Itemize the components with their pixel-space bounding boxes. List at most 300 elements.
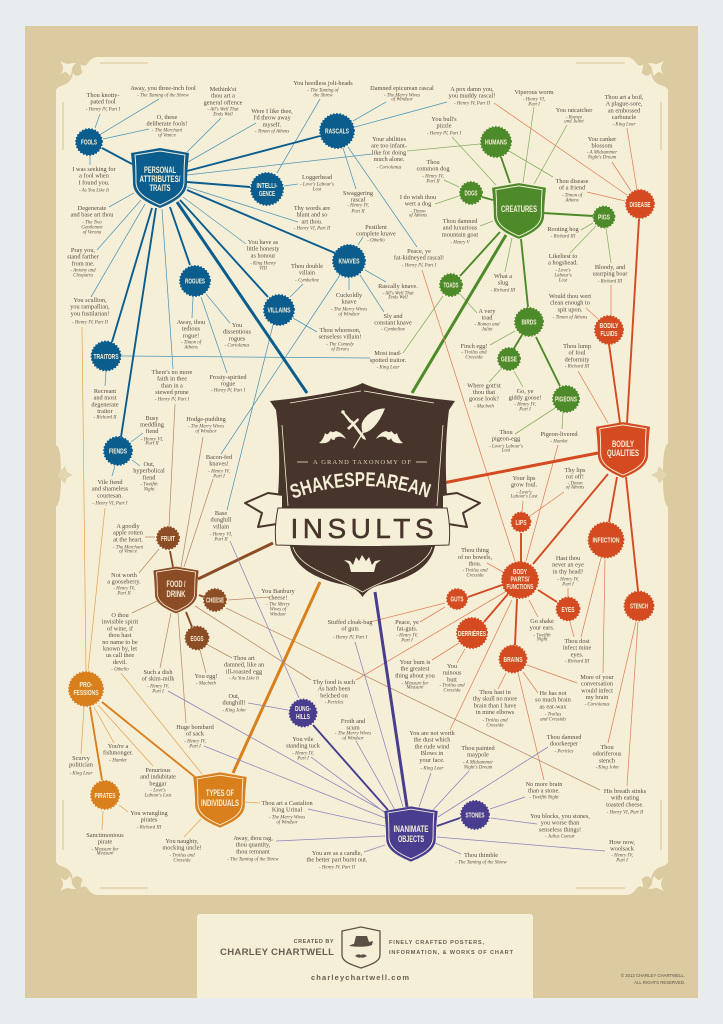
quote: faith in thee — [157, 376, 187, 383]
connectors: brown branches — [170, 551, 204, 627]
quote: brain than I have — [474, 702, 516, 709]
node: fiends — [104, 437, 132, 465]
quote: - Love's — [150, 789, 166, 794]
quote: Not worth — [111, 572, 137, 579]
quote: Part I — [188, 745, 201, 750]
node: bodily fluids — [595, 316, 623, 344]
quote: grow foul. — [511, 482, 538, 489]
quote: villain — [213, 523, 230, 530]
quote: Most toad- — [374, 350, 402, 357]
quote: Thou art a Castalion — [261, 800, 313, 807]
quote: Thou art a boil, — [605, 94, 643, 101]
quote: Night — [536, 638, 548, 643]
quote: tedious — [182, 326, 201, 333]
quote: Your lips — [513, 475, 535, 482]
quote: your face. — [419, 757, 445, 764]
quote: Thou damned — [443, 218, 477, 225]
quote: damned, like an — [224, 662, 265, 669]
node: professions — [69, 672, 103, 706]
quote: A pox damn you, — [450, 86, 494, 93]
quote: Thou damned — [547, 734, 581, 741]
node: geese — [498, 348, 520, 370]
ribbon right tail — [442, 493, 480, 527]
quote: Huge bombard — [176, 724, 214, 731]
quote: of Errors — [331, 348, 349, 353]
quote: Thou thing — [461, 547, 489, 554]
quote: fat-guts. — [397, 626, 418, 633]
quote: You are as a candle, — [312, 850, 362, 857]
quote: of Windsor — [338, 313, 360, 318]
quote: knaves! — [209, 461, 229, 468]
node: infection — [588, 522, 624, 558]
quote: Methink'st — [210, 86, 236, 93]
quote: invisible spirit — [102, 619, 138, 626]
quote: Hast thou — [556, 555, 580, 562]
quote: - Othello — [111, 668, 129, 673]
quote: Juliet — [482, 328, 493, 333]
quote: Penurious — [145, 767, 171, 774]
quote: goose look? — [469, 395, 499, 402]
quote: than a stone. — [528, 788, 560, 795]
quote: Finch egg! — [460, 343, 488, 350]
node: toads: TOADS — [444, 282, 459, 290]
quote: of wine, if — [107, 625, 134, 632]
quote: - Timon of — [562, 194, 583, 199]
quote: Lost — [312, 188, 322, 193]
quote: little honesty — [247, 246, 280, 253]
quote: - Troilus and — [169, 854, 195, 859]
node: rascals — [320, 114, 354, 148]
quote: - Timon of Athens — [255, 130, 289, 135]
node: stench: STENCH — [630, 604, 648, 610]
website: charleychartwell.com — [311, 973, 409, 982]
icon: shield with hat and moustache — [342, 927, 380, 968]
quote: of Verona — [83, 231, 102, 236]
quote: - King Lear — [613, 123, 636, 128]
quote: Peace, ye — [407, 248, 431, 255]
quote: thou hast — [109, 632, 132, 639]
node: pigeons — [553, 386, 579, 412]
quote: - Cymbeline — [295, 279, 320, 284]
quote: pizzle — [436, 123, 452, 130]
quote: - Hamlet — [550, 440, 568, 445]
quote: Night's Dream — [587, 156, 617, 161]
quote: thou that — [473, 389, 495, 396]
quote: spotted traitor. — [370, 357, 407, 364]
quote: pigeon-egg — [492, 436, 521, 443]
quote: of a friend — [559, 185, 586, 192]
quote: courtesan. — [97, 492, 123, 499]
quote: - Troilus and — [439, 684, 465, 689]
quote: - Romeo and — [474, 323, 500, 328]
quote: - Twelfth — [533, 634, 551, 639]
quote: - King John — [222, 709, 246, 714]
quote: Thou lump — [563, 343, 591, 350]
icon: left flourish — [319, 431, 346, 443]
shield: types of individuals — [193, 772, 247, 828]
quote: Labour's — [553, 274, 572, 279]
quote: Hodge-pudding — [186, 416, 226, 423]
quote: at the heart. — [113, 536, 143, 543]
node: professions: FESSIONS — [74, 690, 99, 697]
quote: - Henry IV, — [147, 685, 169, 690]
quote: pated fool — [90, 99, 116, 106]
quote: rot off! — [566, 474, 584, 480]
quote: Away, you three-inch fool — [130, 85, 196, 92]
footer panel — [197, 914, 533, 998]
quote: Out, — [228, 693, 240, 700]
quote: Your bum is — [400, 659, 430, 666]
quote: Labour's Lost — [143, 794, 172, 799]
node: professions: PRO- — [80, 682, 93, 689]
node: cheese: CHEESE — [206, 598, 224, 604]
node: dunghills — [290, 700, 316, 726]
quote: known by, let — [103, 646, 137, 652]
quote: of Venice — [119, 550, 138, 555]
quote: You have as — [248, 239, 278, 246]
quote: Cuckoldly — [336, 292, 362, 299]
quote: - The Merry Wives — [384, 94, 420, 99]
subtitle rules — [297, 461, 427, 463]
quote: Go shake — [530, 618, 554, 625]
quote: thou art a — [211, 93, 235, 100]
quote: blunt and so — [297, 212, 327, 219]
quote: apple rotten — [113, 530, 144, 537]
quote: - The Merry Wives — [188, 425, 224, 430]
ribbon left tail — [245, 493, 283, 527]
quote: Thou thimble — [464, 852, 498, 859]
quote: you muddy rascal! — [449, 93, 495, 100]
node: dogs: DOGS — [464, 190, 478, 198]
node: knaves — [333, 245, 365, 277]
quote: Loggerhead — [302, 174, 332, 181]
quote: carbuncle — [612, 114, 636, 121]
node: guts: GUTS — [450, 596, 464, 604]
quote: from me. — [71, 260, 95, 267]
quote: Wives of — [270, 608, 287, 613]
quote: - Troilus and — [462, 569, 488, 574]
quote: hyperbolical — [133, 468, 165, 475]
quote: You naughty, — [165, 838, 199, 845]
quote: - Henry IV, — [611, 854, 633, 859]
quote: - The Taming of — [308, 89, 339, 94]
quote: Thou art — [233, 655, 255, 662]
quote: senseless villain! — [319, 334, 361, 341]
quote: You — [232, 322, 242, 329]
node: stench — [624, 592, 654, 620]
quote: thing about you — [395, 672, 436, 679]
quote: A goodly — [116, 523, 140, 530]
quote: Lost — [501, 449, 511, 454]
quote: - Coriolanus — [225, 344, 250, 349]
quote: wert a dog — [405, 201, 432, 208]
quote: Vile fiend — [98, 479, 122, 486]
quote: Labour's Lost — [509, 495, 538, 500]
quote: the greatest — [401, 666, 430, 673]
quote: stand farther — [67, 254, 100, 261]
node: knaves: KNAVES — [338, 258, 360, 266]
node: intelligence: GENCE — [259, 191, 275, 198]
quote: and base art thou — [71, 212, 114, 219]
quote: - Henry IV, — [208, 470, 230, 475]
quote: Part I — [151, 690, 164, 695]
shield: bodily qualities: BODILY — [612, 439, 634, 449]
decorative corner and side ornaments — [57, 61, 667, 891]
quote: the dust which — [414, 737, 451, 744]
quote: - Henry IV, Part I — [155, 398, 190, 403]
quote: - The Merry Wives — [335, 732, 371, 737]
connectors: green branches — [460, 157, 593, 386]
quote: A very — [479, 308, 495, 315]
quote: and indubitate — [140, 774, 176, 781]
quote: Away, thou — [177, 319, 205, 326]
quote: - Julius Caesar — [545, 835, 575, 840]
quote: More of your — [580, 674, 614, 681]
quote: - Henry IV, — [347, 204, 369, 209]
node: fruit — [157, 527, 179, 549]
quote: Cleopatra — [73, 274, 93, 279]
connectors: green quote lines — [403, 107, 611, 434]
quote: Peace, ye — [395, 619, 419, 626]
node: bodily fluids: FLUIDS — [600, 331, 618, 338]
quote: would infect — [581, 687, 613, 694]
quote: of Windsor — [391, 98, 413, 103]
shield: types of individuals: TYPES OF — [206, 788, 234, 798]
quote: - The Merry Wives — [269, 816, 305, 821]
node: pigs — [594, 206, 614, 228]
quote: King Urinal — [272, 807, 302, 814]
quote: - Love's Labour's — [300, 183, 334, 188]
quote: Bacon-fed — [206, 454, 232, 461]
quote: - Othello — [367, 239, 385, 244]
icon: sword and quill — [341, 408, 385, 448]
quote: Thy words are — [294, 205, 330, 212]
node: rogues — [180, 266, 210, 296]
quote: ill-roasted egg — [226, 668, 263, 675]
quote: You egg! — [195, 673, 217, 680]
quote: dissentious — [223, 329, 252, 336]
quote: rogues — [229, 335, 246, 342]
central title emblem: SHAKESPEAREAN — [290, 472, 432, 498]
quote: blossom — [592, 143, 613, 150]
node: dunghills: DUNG- — [295, 706, 311, 713]
quote: Likeliest to — [549, 253, 577, 260]
quote: - Richard III — [565, 365, 590, 370]
quote: Cressida — [466, 574, 484, 579]
quote: - Pericles — [325, 701, 344, 706]
emblem shield — [270, 383, 455, 597]
quote: and Juliet — [564, 120, 584, 125]
quote: Froth and — [341, 718, 365, 725]
quote: clean enough to — [550, 300, 590, 307]
quote: Rooting hog — [547, 226, 579, 233]
quote: You scullion, — [73, 297, 107, 304]
quote: my brain — [586, 694, 609, 701]
quote: fishmonger. — [103, 750, 133, 757]
quote: You heedless jolt-heads — [293, 80, 353, 87]
quote: I'd throw away — [253, 115, 292, 122]
node: villains — [264, 295, 294, 325]
node: fools: FOOLS — [81, 140, 97, 146]
shield: food and drink: FOOD / — [166, 579, 186, 589]
quote: usurping boar — [593, 271, 628, 278]
quote: of Windsor — [342, 737, 364, 742]
quote: Thou double — [291, 263, 323, 270]
quote: deliberate fools! — [146, 120, 188, 128]
quote: - Henry VI, — [210, 533, 232, 538]
quote: - The Taming of the Shrew — [227, 858, 279, 863]
node: geese: GEESE — [501, 356, 517, 364]
connectors: purple quote lines — [168, 541, 605, 854]
quote: - All's Well That — [382, 292, 414, 297]
quote: - Henry IV, Part I — [211, 389, 246, 394]
quote: an embossed — [608, 107, 641, 114]
node: lips: LIPS — [516, 520, 527, 527]
node: infection: INFECTION — [592, 538, 620, 544]
node: pirates — [91, 781, 119, 809]
quote: Pray you, — [71, 247, 95, 254]
quote: - Henry IV, — [184, 740, 206, 745]
node: humans: HUMANS — [485, 140, 507, 146]
quote: - Henry VI, Part I — [93, 502, 128, 507]
quote: I do wish thou — [400, 194, 436, 201]
node: rogues: ROGUES — [185, 278, 205, 286]
quote: ruinous — [443, 670, 462, 677]
shield: food and drink — [153, 567, 199, 613]
quote: dunghill — [210, 517, 232, 524]
quote: Go, ye — [517, 388, 533, 395]
quote: Thou hast in — [479, 689, 511, 696]
quote: woolsack — [610, 846, 635, 853]
quote: - Richard III — [137, 826, 162, 831]
node: brains — [500, 646, 526, 672]
emblem inner highlights — [282, 391, 443, 592]
quote: Part I — [561, 583, 574, 588]
quote: - Henry IV, — [422, 175, 444, 180]
quote: of foul — [569, 350, 586, 357]
quote: - Henry IV, — [557, 578, 579, 583]
quote: Your abilities — [372, 136, 406, 143]
quote: - Henry IV, Part I — [402, 264, 437, 269]
node: body parts — [502, 562, 538, 598]
quote: rascal — [351, 197, 366, 204]
quote: Part II — [213, 538, 228, 543]
quote: giddy goose! — [509, 395, 541, 402]
quote: - Twelfth Night — [529, 796, 559, 801]
node: eggs — [186, 626, 208, 650]
quote: devil. — [113, 659, 128, 666]
quote: conversation — [581, 681, 614, 688]
quote: No more brain — [526, 781, 562, 788]
quote: Thy food is such — [313, 679, 355, 686]
quote: spit upon. — [558, 306, 583, 313]
connectors: brown quote lines — [132, 404, 600, 790]
shield: personal attributes — [131, 148, 189, 208]
quote: toad — [482, 315, 493, 322]
quote: Cressida — [465, 356, 483, 361]
quote: Athens — [564, 199, 579, 204]
node: eyes: EYES — [562, 607, 575, 614]
node: disease — [626, 190, 654, 218]
quote: politician — [69, 762, 94, 769]
quote: - As You Like It — [229, 677, 260, 682]
quote: of Venice — [158, 134, 177, 139]
connectors: red quote lines — [356, 103, 638, 786]
quote: - Henry IV, Part I — [333, 636, 368, 641]
node: derrieres: DERRIÈRES — [458, 629, 486, 638]
quote: Cressida — [173, 859, 191, 864]
quote: Thy lips — [565, 467, 585, 474]
quote: Part I — [615, 859, 628, 864]
quote: You canker — [588, 136, 616, 143]
quote: deformity — [565, 356, 590, 363]
quote: Where gott'st — [467, 383, 501, 390]
quote: - Romeo — [566, 116, 583, 121]
quote: of skim-milk — [142, 676, 175, 683]
quote: - Henry IV, Part II — [319, 866, 355, 871]
quote: you rampallian, — [70, 304, 110, 311]
connectors: orange quote lines — [81, 327, 260, 837]
banner — [275, 508, 450, 546]
quote: - Henry IV, — [396, 634, 418, 639]
quote: thy skull no more — [473, 696, 517, 703]
quote: A plague-sore, — [606, 101, 643, 108]
connector: red trunk — [443, 453, 598, 483]
node: villains: VILLAINS — [268, 308, 291, 314]
node: humans — [481, 127, 511, 157]
quote: odoriferous — [592, 751, 622, 758]
quote: Out, — [143, 461, 155, 468]
quote: - Macbeth — [474, 405, 495, 410]
quote: - Henry IV, — [514, 403, 536, 408]
quote: you fustilarian! — [71, 310, 109, 317]
quote: thou quantity, — [236, 842, 271, 849]
connectors: blue quote lines — [90, 99, 447, 510]
quote: a fool when — [79, 173, 110, 180]
title: Shakespearean — [293, 486, 431, 499]
quote: of Windsor — [195, 430, 217, 435]
quote: meddling — [140, 422, 165, 428]
quote: complete knave — [356, 231, 396, 238]
quote: - Richard II — [94, 416, 117, 421]
quote: as honour — [251, 252, 276, 259]
quote: cheese! — [269, 595, 287, 602]
quote: - Richard III — [551, 235, 576, 240]
node: lips — [512, 512, 530, 532]
quote: Stuffed cloak-bag — [328, 619, 372, 626]
quote: - A Midsummer — [587, 151, 617, 156]
quote: - Henry IV, — [113, 587, 135, 592]
quote: of sack — [186, 731, 205, 738]
node: intelligence: INTELLI- — [256, 183, 278, 190]
quote: Blows in — [421, 750, 444, 757]
quote: - Timon of Athens — [553, 316, 587, 321]
quote: - Macbeth — [196, 682, 217, 687]
shield: bodily qualities — [596, 422, 650, 478]
node: pigs: PIGS — [598, 214, 610, 222]
quote: - Henry V — [450, 241, 471, 246]
quote: - Henry VI, — [141, 438, 163, 443]
quote: mountain goat — [442, 231, 478, 238]
node: guts — [447, 589, 467, 609]
footer box — [197, 914, 533, 998]
node: cheese — [204, 589, 226, 611]
quote: Thou dost — [564, 638, 590, 645]
quote: Part I — [296, 757, 309, 762]
central title emblem — [244, 383, 481, 597]
quote: - King Lear — [421, 767, 444, 772]
connector: green trunk — [412, 235, 506, 393]
